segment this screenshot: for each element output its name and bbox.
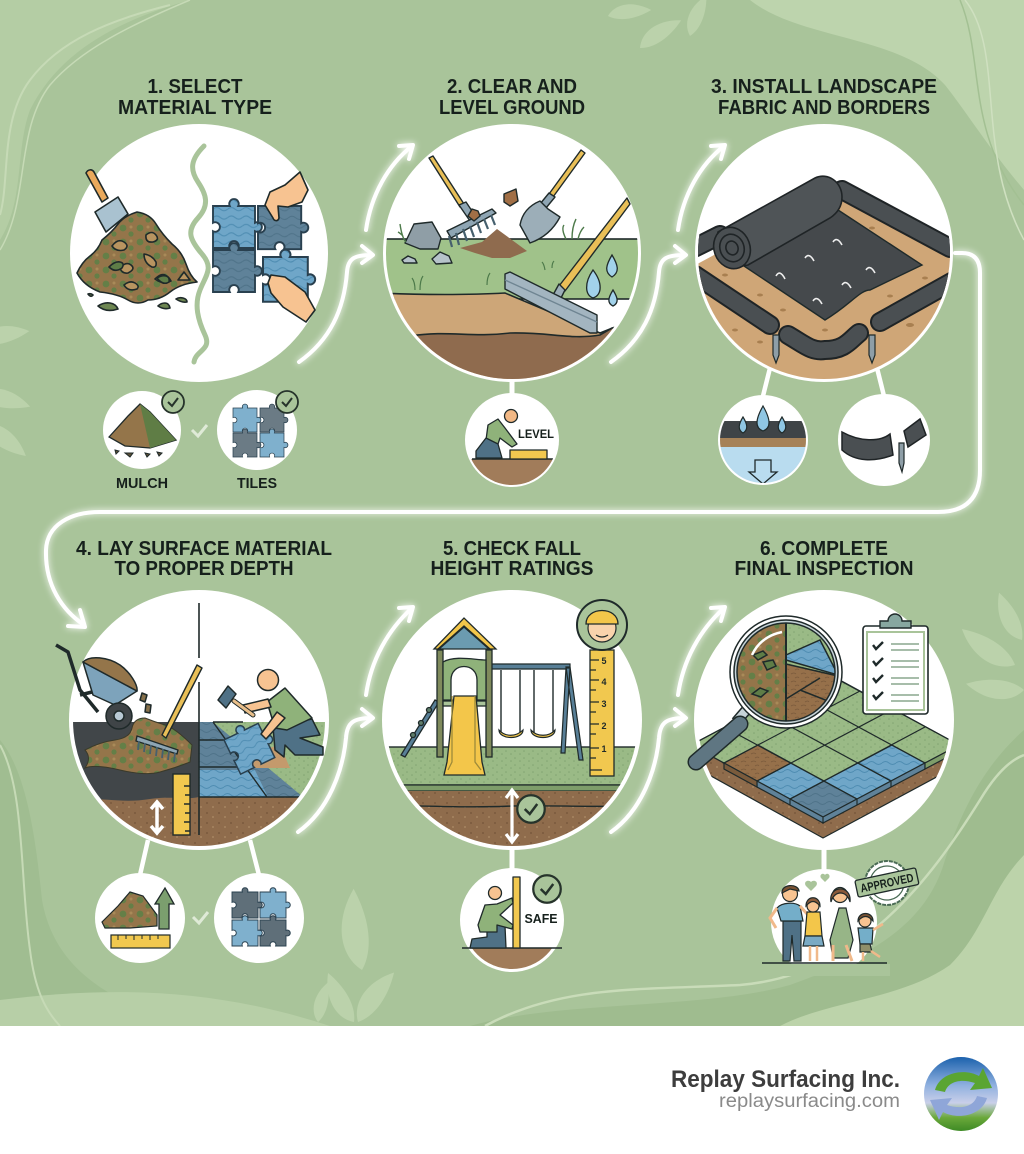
connector (510, 381, 514, 394)
website: replaysurfacing.com (719, 1091, 900, 1112)
icon: swing set (490, 664, 583, 760)
heading 3: FABRIC AND BORDERS (718, 97, 930, 119)
sub-circle: puzzle tiles (214, 873, 304, 963)
heading 5: HEIGHT RATINGS (430, 558, 594, 580)
heading 5: 5. CHECK FALL (443, 538, 581, 560)
icon: rock and dirt mound (398, 189, 527, 264)
label: tiles: TILES (237, 475, 277, 492)
icon: height ruler: 4 (601, 677, 607, 687)
icon: child in helmet badge (577, 600, 627, 650)
safety surface (380, 747, 644, 785)
border edging segments (690, 190, 955, 350)
heading 4 (76, 538, 332, 580)
sub-circle: safe (460, 868, 564, 972)
icon: play tower and slide (401, 618, 496, 775)
soil layer (101, 797, 299, 846)
icon: hearts (805, 874, 830, 891)
icon: trowel (86, 170, 128, 232)
sub-circle: drainage (715, 395, 811, 487)
icon: wheelbarrow (56, 645, 151, 729)
check badge (533, 875, 561, 903)
heading 4: 4. LAY SURFACE MATERIAL (76, 538, 332, 560)
icon: grass tufts (563, 219, 584, 239)
main circle (69, 590, 329, 850)
check badge (517, 795, 545, 823)
heading 6: FINAL INSPECTION (734, 558, 914, 580)
connectors (140, 840, 259, 875)
heading 1: MATERIAL TYPE (118, 97, 272, 119)
sand bed (698, 202, 950, 379)
fabric staples (776, 240, 875, 304)
tile field (214, 722, 325, 796)
divider line (198, 603, 200, 835)
footer (0, 1026, 1024, 1154)
heading 5 (430, 538, 594, 580)
icon: rake (429, 156, 496, 247)
panel: step 2 clear and level ground (380, 76, 650, 489)
main circle (695, 124, 953, 382)
heading 1 (118, 76, 272, 119)
icon: placed puzzle tile (221, 715, 280, 774)
check badge (276, 391, 298, 413)
heading 3: 3. INSTALL LANDSCAPE (711, 76, 937, 98)
heading 6 (734, 538, 914, 580)
sub-circle: edging joint (838, 394, 930, 486)
icon: leveling bar (505, 198, 630, 333)
icon: height ruler: 5 (601, 656, 607, 666)
icon: worker placing tile (218, 670, 323, 757)
heading 2: 2. CLEAR AND (447, 76, 577, 98)
check between options (192, 425, 207, 436)
main circle (383, 124, 641, 382)
sub-circle: mulch option (103, 391, 184, 492)
soil (408, 791, 616, 846)
icon: fall height arrow (506, 790, 518, 842)
flow arrows (46, 145, 980, 832)
icon: mulch pile (77, 212, 197, 310)
heading 3 (711, 76, 937, 119)
icon: clipboard checklist (863, 614, 928, 714)
icon: height ruler: 1 (601, 744, 607, 754)
label: mulch: MULCH (116, 475, 168, 492)
icon: depth arrow (151, 802, 163, 833)
icon: height ruler: 2 (601, 721, 607, 731)
sub-circle: tiles option (217, 390, 298, 492)
sub-circle: family approved (760, 855, 922, 976)
icon: stakes (773, 335, 875, 363)
logo (924, 1057, 998, 1131)
icon: magnifying glass (696, 616, 842, 762)
icon: height ruler: 3 (601, 699, 607, 709)
icon: shovel (520, 150, 585, 243)
icon: fabric roll (708, 176, 842, 274)
panel: step 3 install landscape fabric and borders (690, 76, 960, 487)
main circle (694, 590, 954, 850)
icon: water drops (587, 255, 617, 306)
heading 2 (439, 76, 585, 119)
main circle (382, 590, 642, 850)
icon: puzzle tiles and hands (213, 172, 315, 322)
brown bed under tile (253, 746, 290, 768)
panel: step 5 check fall height ratings (380, 538, 644, 972)
connectors (763, 368, 884, 396)
icon: height ruler (590, 650, 614, 776)
ground layers (386, 238, 638, 379)
panel: step 1 select material type (70, 76, 328, 492)
connector (510, 849, 514, 872)
label: level: LEVEL (518, 427, 554, 441)
stamp: approved (852, 855, 922, 911)
fabric sheet (738, 208, 922, 320)
check badge (162, 391, 184, 413)
sub-circle: mulch depth (95, 873, 185, 963)
sub-circle: level (465, 393, 559, 489)
label: safe: SAFE (524, 911, 558, 926)
mulch spread (85, 718, 192, 774)
panel: step 4 lay surface material (56, 538, 332, 963)
tiled surface (700, 680, 949, 839)
connector (822, 849, 826, 871)
heading 1: 1. SELECT (148, 76, 242, 98)
icon: depth ruler (173, 774, 190, 835)
icon: rake in mulch (136, 665, 202, 762)
panel: step 6 complete final inspection (691, 538, 959, 976)
main circle (70, 124, 328, 382)
fabric layer (70, 722, 199, 802)
icon: family (770, 886, 883, 961)
heading 6: 6. COMPLETE (760, 538, 888, 560)
heading 2: LEVEL GROUND (439, 97, 585, 119)
wavy divider (191, 146, 208, 362)
check between icons (193, 912, 208, 923)
brand name: Replay Surfacing Inc. (671, 1066, 900, 1093)
stamp: approved: APPROVED (859, 870, 915, 895)
heading 4: TO PROPER DEPTH (114, 558, 294, 580)
